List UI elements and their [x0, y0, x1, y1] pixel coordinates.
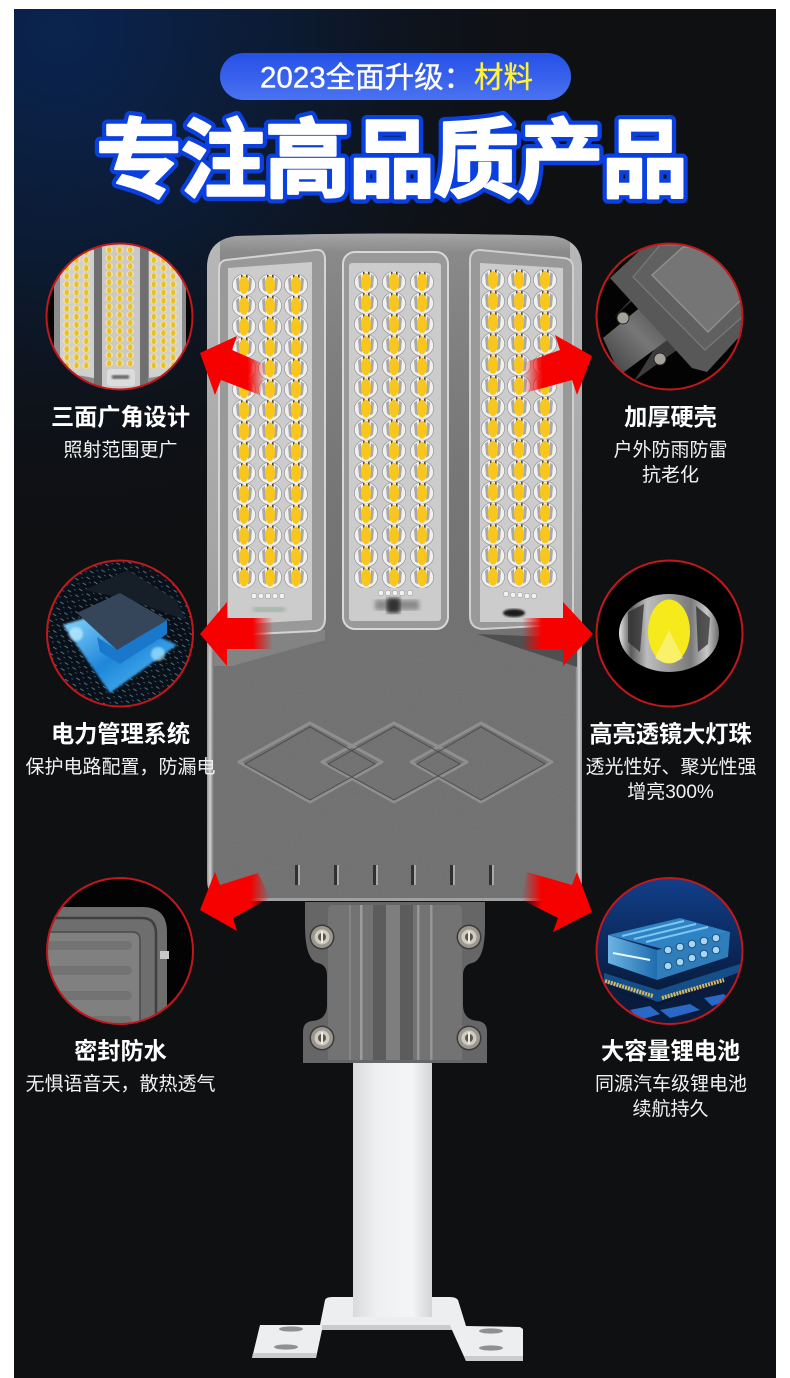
callout: thick shell — [596, 241, 750, 486]
pill: upgrade badge — [220, 53, 571, 100]
callout: wide-angle design: 照射范围更广 — [63, 439, 178, 461]
callout: high-brightness lens — [585, 560, 757, 803]
callout: waterproof seal: 密封防水 — [74, 1038, 167, 1064]
embossed diamond logo — [239, 723, 552, 802]
callout: large lithium battery: 续航持久 — [632, 1098, 709, 1120]
callout: large lithium battery: 大容量锂电池 — [601, 1038, 740, 1064]
ventilation slots — [295, 865, 494, 885]
callout: large lithium battery — [595, 877, 747, 1120]
title: 专注高品质产品 — [96, 113, 688, 209]
callout: thick shell: 加厚硬壳 — [624, 404, 717, 430]
callout: power management — [25, 560, 216, 778]
arrow: top right — [523, 335, 592, 395]
pill: upgrade badge: 2023全面升级： — [260, 62, 473, 94]
street lamp body — [207, 232, 582, 902]
icon: shell corner with pipe — [598, 244, 742, 388]
icon: glowing chip — [46, 560, 194, 708]
callout: thick shell: 户外防雨防雷 — [613, 439, 728, 461]
centre LED panel — [343, 252, 448, 629]
right LED panel — [470, 250, 573, 629]
icon: battery pack — [596, 877, 745, 1030]
callout: wide-angle design: 三面广角设计 — [51, 404, 190, 430]
callout: high-brightness lens: 增亮300% — [627, 781, 714, 803]
pill: upgrade badge: 材料 — [474, 62, 533, 94]
mounting bracket — [303, 902, 487, 1063]
callout: waterproof seal — [25, 877, 216, 1095]
pole and base — [252, 1060, 523, 1361]
callout: power management: 电力管理系统 — [51, 721, 190, 747]
left LED panel — [219, 250, 325, 635]
callout: high-brightness lens: 高亮透镜大灯珠 — [589, 721, 752, 747]
title: 专注高品质产品 — [96, 113, 688, 209]
callout: thick shell: 抗老化 — [642, 464, 699, 486]
callout: high-brightness lens: 透光性好、聚光性强 — [585, 756, 757, 778]
callout: wide-angle design — [46, 243, 194, 461]
callout: power management: 保护电路配置，防漏电 — [25, 756, 216, 778]
icon: mini lamp panels — [46, 243, 194, 391]
arrow: middle left — [200, 602, 273, 666]
arrow: top left — [200, 336, 266, 395]
arrow: middle right — [522, 602, 593, 666]
icon: shell corner — [48, 879, 192, 1023]
arrow: bottom right — [522, 872, 592, 932]
callout: large lithium battery: 同源汽车级锂电池 — [595, 1073, 747, 1095]
icon: lens bead — [596, 560, 744, 708]
arrow: bottom left — [200, 872, 270, 931]
callout: waterproof seal: 无惧语音天，散热透气 — [25, 1073, 216, 1095]
